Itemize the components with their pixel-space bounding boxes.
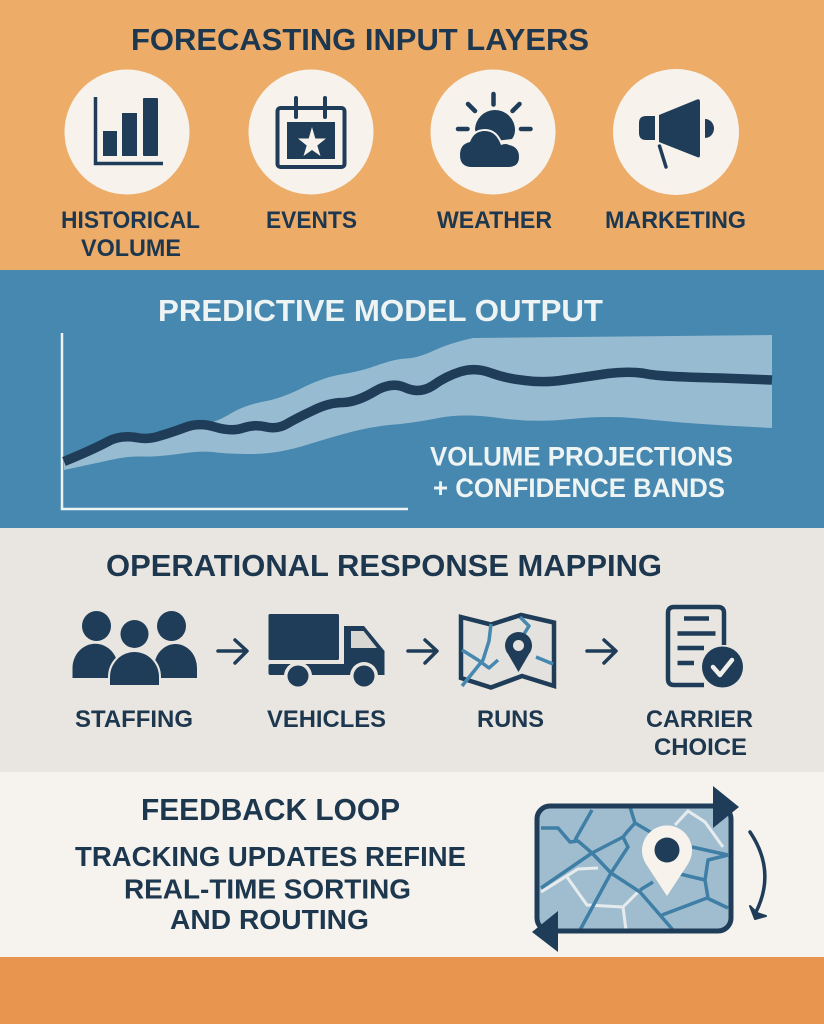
label: historical volume: HISTORICAL bbox=[61, 207, 200, 234]
panel: feedback loop bbox=[0, 772, 824, 957]
label: carrier choice: CHOICE bbox=[654, 734, 747, 761]
heading: forecasting input layers: FORECASTING INPUT LAYERS bbox=[131, 22, 589, 57]
text block: tracking updates: TRACKING UPDATES REFINE bbox=[75, 841, 466, 872]
icon: marketing megaphone bbox=[613, 69, 739, 195]
footer band bbox=[0, 957, 824, 1024]
text block: tracking updates: REAL-TIME SORTING bbox=[124, 874, 411, 904]
label: runs: RUNS bbox=[477, 706, 544, 733]
icon: runs map bbox=[461, 615, 554, 688]
icon: vehicles truck bbox=[268, 614, 384, 690]
panel: operational response mapping bbox=[0, 528, 824, 772]
label: vehicles: VEHICLES bbox=[267, 706, 386, 733]
label: marketing: MARKETING bbox=[605, 207, 746, 234]
panel: forecasting input layers bbox=[0, 0, 824, 270]
arrow: staffing to vehicles bbox=[218, 640, 247, 663]
heading: predictive model output: PREDICTIVE MODEL OUTPUT bbox=[158, 293, 603, 328]
heading: operational response mapping: OPERATIONAL RESPONSE MAPPING bbox=[106, 548, 662, 583]
chart caption: volume projections and confidence bands: VOLUME PROJECTIONS bbox=[430, 442, 733, 472]
arrow: vehicles to runs bbox=[408, 640, 437, 663]
label: historical volume bbox=[61, 207, 200, 262]
icon: historical volume bar chart bbox=[64, 70, 190, 194]
label: carrier choice bbox=[646, 706, 753, 761]
chart caption: volume projections and confidence bands: + CONFIDENCE BANDS bbox=[433, 473, 725, 503]
chart caption: volume projections and confidence bands bbox=[430, 442, 733, 503]
label: carrier choice: CARRIER bbox=[646, 706, 753, 733]
panel: predictive model output bbox=[0, 270, 824, 528]
line chart: volume projection with confidence band bbox=[62, 333, 772, 509]
icon: feedback map with loop arrows bbox=[532, 786, 766, 952]
icon: weather sun and cloud bbox=[430, 70, 556, 194]
icon: carrier choice document bbox=[668, 607, 743, 688]
label: events: EVENTS bbox=[266, 207, 357, 234]
text block: tracking updates bbox=[75, 841, 466, 935]
icon: staffing people bbox=[72, 611, 197, 685]
heading: feedback loop: FEEDBACK LOOP bbox=[141, 793, 400, 827]
arrow: runs to carrier choice bbox=[587, 640, 616, 663]
label: historical volume: VOLUME bbox=[81, 235, 181, 262]
text block: tracking updates: AND ROUTING bbox=[170, 904, 369, 935]
label: weather: WEATHER bbox=[437, 207, 552, 234]
label: staffing: STAFFING bbox=[75, 706, 193, 733]
icon: events calendar bbox=[248, 70, 374, 194]
